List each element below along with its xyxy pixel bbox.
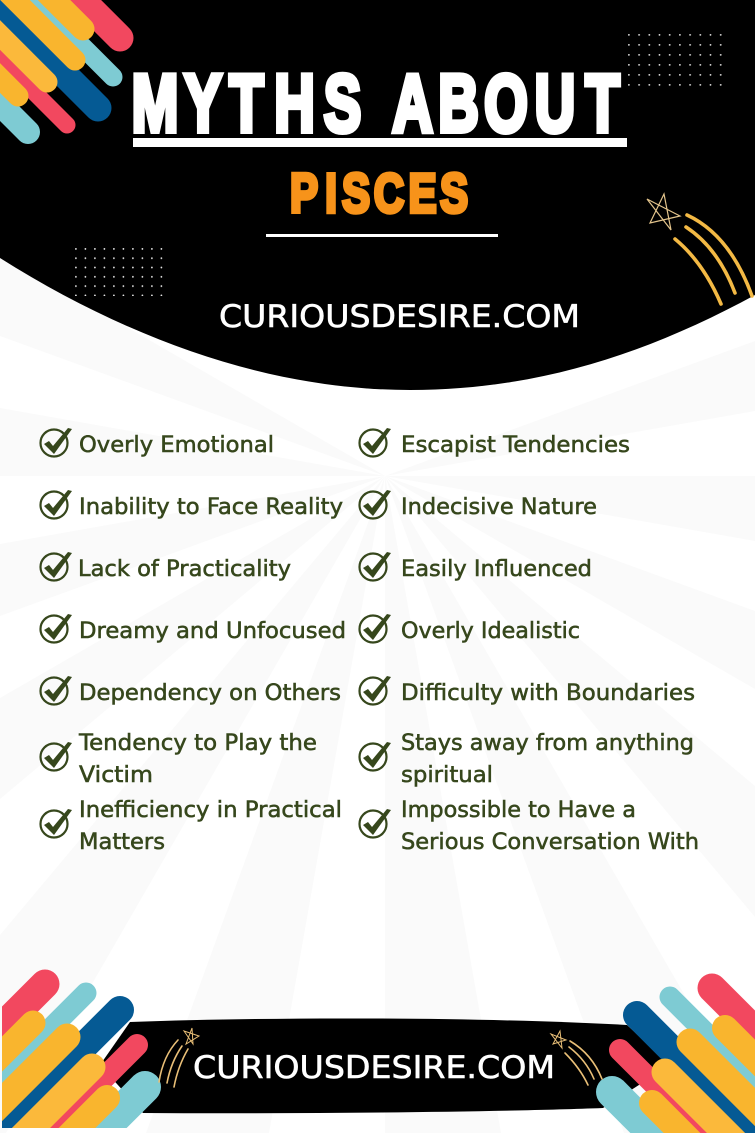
icon: shooting star top — [647, 194, 752, 304]
item: overly emotional — [40, 428, 274, 458]
item: difficulty with boundaries: Difficulty with Boundaries — [401, 681, 695, 706]
item: tendency to play the victim: Victim — [79, 763, 153, 788]
right myths list — [360, 428, 699, 855]
item: overly emotional: Overly Emotional — [79, 433, 274, 458]
dot grid left — [75, 248, 163, 296]
top left colour stripes — [0, 0, 120, 132]
left myths list — [40, 428, 346, 855]
bottom right colour stripes — [612, 988, 755, 1133]
item: dreamy and unfocused: Dreamy and Unfocused — [79, 619, 346, 644]
item: lack of practicality: Lack of Practicality — [78, 557, 291, 582]
title: MYTHS ABOUT — [132, 58, 620, 148]
item: stays away from anything spiritual: Stays away from anything — [401, 731, 694, 756]
bottom left colour stripes — [0, 984, 145, 1133]
item: inability to face reality: Inability to Face Reality — [79, 495, 343, 520]
dot grid top right — [628, 34, 722, 86]
item: dependency on others: Dependency on Others — [79, 681, 341, 706]
item: stays away from anything spiritual: spiritual — [401, 763, 493, 788]
item: easily influenced: Easily Influenced — [401, 557, 592, 582]
item: inefficiency in practical matters: Inefficiency in Practical — [79, 798, 342, 823]
footer black band — [100, 1018, 670, 1113]
item: easily influenced — [360, 552, 592, 582]
item: overly idealistic — [360, 614, 580, 644]
item: indecisive nature: Indecisive Nature — [401, 495, 597, 520]
item: tendency to play the victim: Tendency to Play the — [78, 731, 317, 756]
item: stays away from anything spiritual — [360, 731, 694, 788]
item: inefficiency in practical matters — [40, 798, 342, 855]
icon: shooting star bottom right — [551, 1031, 602, 1085]
title underline — [133, 138, 627, 147]
item: overly idealistic: Overly Idealistic — [401, 619, 580, 644]
item: impossible to have a serious conversation with: Impossible to Have a — [401, 798, 636, 823]
website label top: CURIOUSDESIRE.COM — [219, 299, 580, 335]
item: tendency to play the victim — [40, 731, 317, 788]
subtitle: PISCES — [290, 163, 468, 224]
item: indecisive nature — [360, 490, 597, 520]
item: inefficiency in practical matters: Matters — [79, 830, 165, 855]
icon: shooting star bottom left — [159, 1028, 199, 1087]
website label bottom: CURIOUSDESIRE.COM — [193, 1050, 555, 1086]
item: escapist tendencies: Escapist Tendencies — [401, 433, 630, 458]
item: lack of practicality — [40, 552, 291, 582]
item: impossible to have a serious conversation with — [360, 798, 699, 855]
item: impossible to have a serious conversation with: Serious Conversation With — [401, 830, 699, 855]
header black curved panel — [0, 0, 755, 390]
item: escapist tendencies — [360, 428, 630, 458]
subtitle underline — [266, 234, 498, 237]
